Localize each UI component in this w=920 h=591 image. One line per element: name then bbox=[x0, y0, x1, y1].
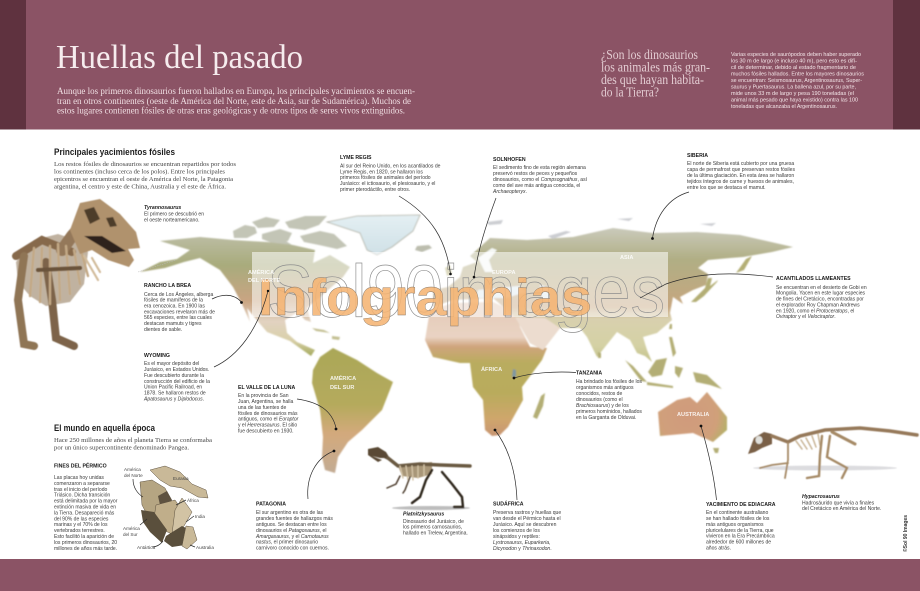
T. rex skeleton bbox=[16, 199, 140, 346]
Acantilados Llameantes caption: en 1920, como el Protoceratops, el bbox=[776, 308, 854, 314]
footer band bbox=[0, 559, 920, 591]
Fines del Pérmico caption: tras el inicio del período bbox=[54, 487, 107, 493]
Acantilados Llameantes caption: ACANTILADOS LLAMEANTES bbox=[776, 276, 851, 282]
question heading: los animales más gran- bbox=[601, 60, 710, 74]
watermark: Infographias bbox=[258, 269, 592, 327]
continent labels: AMÉRICA bbox=[330, 374, 356, 382]
Solnhofen caption: como del ave más antigua conocida, el bbox=[493, 183, 580, 189]
Sudáfrica caption: Jurásico. Aquí se descubren bbox=[493, 522, 557, 528]
Solnhofen caption: El sedimento fino de esta región alemana bbox=[493, 165, 586, 171]
Tyrannosaurus caption: Tyrannosaurus bbox=[144, 205, 181, 211]
Sudáfrica caption: los comienzos de los bbox=[493, 528, 540, 534]
Pangea map: América bbox=[124, 467, 141, 472]
Solnhofen caption: Archaeopteryx. bbox=[492, 189, 527, 195]
Solnhofen caption: SOLNHOFEN bbox=[493, 157, 526, 163]
Ediacara caption: se han hallado fósiles de los bbox=[706, 516, 770, 522]
Acantilados Llameantes caption: el explorador Roy Chapman Andrews bbox=[776, 302, 860, 308]
Siberia caption bbox=[687, 153, 795, 191]
section: principal fossil sites: los continentes (incluso cerca de los polos). Entre los principales bbox=[54, 168, 225, 176]
Lyme Regis caption: Al sur del Reino Unido, en los acantilados de bbox=[340, 164, 441, 170]
Ediacara caption bbox=[706, 502, 776, 552]
Wyoming caption: WYOMING bbox=[144, 353, 170, 359]
Wyoming caption: construcción del edificio de la bbox=[144, 379, 210, 385]
Sudáfrica caption: Preserva rastros y huellas que bbox=[493, 510, 561, 516]
Hypacrosaurus caption: del Cretácico en América del Norte. bbox=[802, 506, 881, 512]
Pangea map: África bbox=[187, 497, 199, 503]
Acantilados Llameantes caption: Oviraptor y el Velociraptor. bbox=[776, 314, 836, 320]
Ediacara caption: más antiguos organismos bbox=[706, 522, 764, 528]
Piatnitzkysaurus caption: Piatnitzkysaurus bbox=[403, 512, 444, 518]
Ediacara caption: pluricelulares de la Tierra, que bbox=[706, 528, 774, 534]
answer text: Varias especies de saurópodos deben haber superado bbox=[731, 52, 861, 58]
Ediacara caption: YACIMIENTO DE EDIACARA bbox=[706, 502, 776, 508]
South America bbox=[312, 348, 393, 473]
Arabia pale area bbox=[515, 317, 560, 350]
El Valle de la Luna caption: Juan, Argentina, se halla bbox=[238, 399, 293, 405]
Solnhofen caption: dinosaurios, como el Compsognathus, así bbox=[493, 177, 588, 183]
section: principal fossil sites: Los restos fósiles de dinosaurios se encuentran repartidos por todos bbox=[54, 161, 236, 168]
Tanzania caption: conocidos, restos de bbox=[576, 391, 622, 397]
Wyoming caption: Es el mayor depósito del bbox=[144, 361, 199, 367]
Rancho La Brea caption: destacan mamuts y tigres bbox=[144, 321, 202, 327]
answer text: mide unos 33 m de largo y pesa 190 toneladas (el bbox=[731, 91, 854, 97]
Solnhofen caption bbox=[492, 157, 588, 195]
section: the world at that time bbox=[54, 423, 212, 452]
intro text: estos lugares contienen fósiles de otras eras geológicas y de otros tipos de seres vivos extinguidos. bbox=[57, 106, 405, 116]
continent labels: AUSTRALIA bbox=[677, 412, 709, 418]
Tanzania caption: dinosaurios (como el bbox=[576, 397, 623, 403]
Rancho La Brea caption: RANCHO LA BREA bbox=[144, 283, 191, 289]
El Valle de la Luna caption: antiguos, como el Eoraptor bbox=[238, 417, 299, 423]
section: the world at that time: por un único supercontinente denominado Pangea. bbox=[54, 444, 189, 452]
El Valle de la Luna caption: EL VALLE DE LA LUNA bbox=[238, 385, 296, 391]
continent labels bbox=[248, 255, 709, 418]
section: principal fossil sites: Principales yacimientos fósiles bbox=[54, 147, 175, 158]
El Valle de la Luna caption: En la provincia de San bbox=[238, 393, 289, 399]
Sudáfrica caption: Lystrosaurus, Euparkeria, bbox=[493, 540, 550, 546]
Tanzania caption bbox=[576, 371, 642, 421]
Fines del Pérmico caption: del 90% de las especies bbox=[54, 516, 109, 522]
Lyme Regis caption: primer pterodáctilo, entre otros. bbox=[340, 187, 410, 193]
Fines del Pérmico caption: Esto facilitó la aparición de bbox=[54, 534, 114, 540]
Patagonia caption: nastus, el primer dinosaurio bbox=[256, 540, 318, 546]
location dots bbox=[240, 237, 702, 452]
continent labels: DEL NORTE bbox=[248, 278, 280, 284]
Eurasia bbox=[433, 228, 793, 362]
continent labels: EUROPA bbox=[492, 270, 516, 276]
Sudáfrica caption: Dicynodon y Thrinaxodon. bbox=[493, 546, 552, 552]
Greenland bbox=[327, 215, 420, 255]
El Valle de la Luna caption: fósiles de dinosaurios más bbox=[238, 411, 298, 417]
Wyoming caption: Union Pacific Railroad, en bbox=[144, 385, 202, 391]
Tanzania caption: primeros homínidos, hallados bbox=[576, 409, 642, 415]
Piatnitzkysaurus caption: hallado en Trelew, Argentina. bbox=[403, 530, 468, 536]
Africa bbox=[425, 302, 547, 436]
Rancho La Brea caption: dientes de sable. bbox=[144, 327, 182, 333]
Fines del Pérmico caption: Triásico. Dicha transición bbox=[54, 493, 110, 499]
header band bbox=[0, 0, 920, 130]
Pangea map: del Sur bbox=[123, 532, 138, 537]
Rancho La Brea caption bbox=[144, 283, 215, 333]
Pangea map: del Norte bbox=[124, 473, 143, 478]
Patagonia caption: PATAGONIA bbox=[256, 502, 286, 508]
Sudáfrica caption bbox=[493, 501, 561, 552]
answer text: animal más pesado que haya existido) contra las 100 bbox=[731, 98, 858, 104]
Tyrannosaurus caption: El primero se descubrió en bbox=[144, 212, 204, 218]
seas bbox=[476, 285, 550, 301]
Fines del Pérmico caption: vertebrados terrestres. bbox=[54, 528, 105, 534]
Sudáfrica caption: SUDÁFRICA bbox=[493, 501, 524, 508]
Fines del Pérmico caption bbox=[54, 462, 118, 552]
Patagonia caption: dinosaurios el Patagosaurus, el bbox=[256, 528, 326, 534]
Fines del Pérmico caption: marinas y el 70% de los bbox=[54, 522, 108, 528]
Piatnitzkysaurus skeleton bbox=[368, 447, 470, 510]
Siberia caption: capa de permafrost que preservan restos fósiles bbox=[687, 167, 795, 173]
Siberia caption: entre los que se destaca el mamut. bbox=[687, 185, 766, 191]
copyright: ©Sol 90 Images bbox=[902, 515, 909, 552]
Fines del Pérmico caption: los primeros dinosaurios, 20 bbox=[54, 540, 117, 546]
El Valle de la Luna caption bbox=[238, 385, 299, 434]
Acantilados Llameantes caption: Se encuentran en el desierto de Gobi en bbox=[776, 285, 867, 291]
El Valle de la Luna caption: una de las fuentes de bbox=[238, 405, 286, 411]
Tanzania caption: organismos más antiguos bbox=[576, 385, 634, 391]
intro text bbox=[57, 86, 415, 116]
Tyrannosaurus caption bbox=[144, 205, 204, 224]
section: the world at that time: El mundo en aquella época bbox=[54, 423, 156, 434]
Lyme Regis caption: Jurásico: el ictiosaurio, el plesiosaurio, y el bbox=[340, 181, 435, 187]
answer text: se encuentran: Seismosaurus, Argentinosaurus, Super- bbox=[731, 78, 862, 84]
Wyoming caption bbox=[143, 353, 210, 402]
continent labels: ASIA bbox=[620, 255, 633, 261]
Hypacrosaurus caption bbox=[802, 494, 881, 512]
Fines del Pérmico caption: comenzaron a separarse bbox=[54, 481, 110, 487]
Pangea map: Australia bbox=[196, 545, 214, 550]
Patagonia caption bbox=[255, 502, 333, 552]
Tanzania caption: en la Garganta de Olduvai. bbox=[576, 415, 636, 421]
Patagonia caption: antiguos. Se destacan entre los bbox=[256, 522, 327, 528]
rib cage mass bbox=[16, 234, 88, 306]
Tanzania caption: Ha brindado los fósiles de los bbox=[576, 379, 642, 385]
Patagonia caption: El sur argentino es otra de las bbox=[256, 510, 324, 516]
Pangea map bbox=[123, 466, 214, 550]
Wyoming caption: Fue descubierto durante la bbox=[144, 373, 204, 379]
islands of Asia and Europe bbox=[445, 256, 752, 453]
Rancho La Brea caption: fósiles de mamíferos de la bbox=[144, 298, 203, 304]
Patagonia caption: grandes fuentes de hallazgos más bbox=[256, 516, 333, 522]
Sudáfrica caption: sinápsidos y reptiles: bbox=[493, 534, 540, 540]
answer text: saurus y Puertasaurus. La ballena azul, por su parte, bbox=[731, 85, 856, 91]
Fines del Pérmico caption: Las placas hoy unidas bbox=[54, 475, 104, 481]
Acantilados Llameantes caption bbox=[776, 276, 867, 320]
Fines del Pérmico caption: está delimitada por la mayor bbox=[54, 499, 118, 505]
answer text: cil de determinar, debido al estado fragmentario de bbox=[731, 65, 856, 71]
question heading: des que hayan habita- bbox=[601, 72, 704, 87]
arctic islands bbox=[233, 216, 347, 249]
Fines del Pérmico caption: FINES DEL PÉRMICO bbox=[54, 462, 107, 470]
Acantilados Llameantes caption: Mongolia. Yacen en este lugar especies bbox=[776, 291, 866, 297]
Ediacara caption: En el continente australiano bbox=[706, 510, 768, 516]
Wyoming caption: 1878. Se hallaron restos de bbox=[144, 391, 206, 397]
Siberia caption: SIBERIA bbox=[687, 153, 708, 159]
Solnhofen caption: preservó restos de peces y pequeños bbox=[493, 171, 578, 177]
Piatnitzkysaurus caption: los primeros carnosaurios, bbox=[403, 524, 462, 530]
answer text: los 30 m de largo (e incluso 40 m), pero esto es difí- bbox=[731, 59, 857, 65]
Pangea map: América bbox=[123, 526, 140, 531]
section: principal fossil sites bbox=[54, 147, 236, 190]
Wyoming caption: Jurásico, en Estados Unidos. bbox=[144, 367, 209, 373]
Lyme Regis caption: primeros fósiles de animales del período bbox=[340, 175, 431, 181]
Tanzania caption: Brachiosaurus) y de los bbox=[576, 403, 629, 409]
Australia bbox=[658, 392, 727, 442]
answer text: toneladas que alcanzaba el Argentinosaurus. bbox=[731, 104, 837, 110]
watermark: Sol90images bbox=[267, 250, 665, 333]
intro text: tran en otros continentes (oeste de América del Norte, este de Asia, sur de Sudamérica). Muchos de bbox=[57, 96, 411, 107]
continent labels: AMÉRICA bbox=[248, 268, 274, 276]
Wyoming caption: Apatosaurus y Diplodocus. bbox=[143, 396, 204, 402]
Ediacara caption: años atrás. bbox=[706, 546, 731, 552]
Fines del Pérmico caption: extinción masiva de vida en bbox=[54, 504, 116, 510]
continent labels: DEL SUR bbox=[330, 385, 354, 391]
Tyrannosaurus caption: el oeste norteamericano. bbox=[144, 218, 200, 224]
Patagonia caption: carnívoro conocido con cuernos. bbox=[256, 546, 329, 552]
section: principal fossil sites: epicentros se encuentran el oeste de América del Norte, la Patagonia bbox=[54, 176, 233, 183]
answer text bbox=[731, 52, 864, 110]
North America bbox=[140, 237, 350, 356]
Lyme Regis caption bbox=[340, 155, 441, 193]
Lyme Regis caption: Lyme Regis, en 1820, se hallaron los bbox=[340, 169, 423, 175]
question heading: ¿Son los dinosaurios bbox=[601, 47, 698, 62]
El Valle de la Luna caption: fue descubierto en 1930. bbox=[238, 428, 294, 434]
Acantilados Llameantes caption: de fines del Cretácico, encontradas por bbox=[776, 297, 864, 303]
Ediacara caption: alrededor de 600 millones de bbox=[706, 540, 771, 546]
Pangea map: Antártica bbox=[137, 545, 156, 550]
section: the world at that time: Hace 250 millones de años el planeta Tierra se conformaba bbox=[54, 437, 212, 444]
leader lines bbox=[138, 192, 773, 500]
Hypacrosaurus caption: Hypacrosaurus bbox=[802, 494, 840, 500]
section: principal fossil sites: argentina, el centro y este de China, Australia y el este de África. bbox=[54, 182, 226, 190]
continent labels: ÁFRICA bbox=[481, 366, 502, 373]
title: Huellas del pasado bbox=[56, 39, 303, 76]
Sudáfrica caption: van desde el Pérmico hasta el bbox=[493, 516, 561, 522]
El Valle de la Luna caption: y el Herrerasaurus. El sitio bbox=[238, 423, 297, 429]
Patagonia caption: Amargasaurus, y el Carnotaurus bbox=[255, 534, 329, 540]
Ediacara caption: vivieron en la Era Precámbrica bbox=[706, 534, 775, 540]
question heading: do la Tierra? bbox=[601, 84, 659, 100]
Pangea map: Eurasia bbox=[173, 476, 189, 481]
question heading bbox=[601, 47, 710, 100]
Rancho La Brea caption: excavaciones revelaron más de bbox=[144, 309, 215, 315]
Fines del Pérmico caption: millones de años más tarde. bbox=[54, 546, 117, 552]
Hypacrosaurus caption: Hadrosáurido que vivía a finales bbox=[802, 500, 875, 506]
Hypacrosaurus skeleton bbox=[748, 428, 917, 478]
Tanzania caption: TANZANIA bbox=[576, 371, 602, 377]
Rancho La Brea caption: Cerca de Los Ángeles, alberga bbox=[144, 291, 213, 298]
Rancho La Brea caption: era cenozoica. En 1900 las bbox=[144, 304, 205, 310]
Pangea map: India bbox=[195, 514, 205, 519]
Caribbean islands bbox=[312, 328, 340, 340]
Fines del Pérmico caption: la Tierra. Desapareció más bbox=[54, 510, 115, 516]
Siberia caption: tejidos íntegros de carne y huesos de animales, bbox=[687, 179, 794, 185]
Siberia caption: El norte de Siberia está cubierto por una gruesa bbox=[687, 161, 794, 167]
Siberia caption: de la última glaciación. En esta área se hallaron bbox=[687, 173, 794, 179]
Lyme Regis caption: LYME REGIS bbox=[340, 155, 372, 161]
Rancho La Brea caption: 565 especies, entre las cuales bbox=[144, 315, 212, 321]
world map bbox=[140, 215, 793, 473]
Piatnitzkysaurus caption: Dinosaurio del Jurásico, de bbox=[403, 519, 464, 525]
answer text: muchos fósiles hallados. Entre los mayores dinosaurios bbox=[731, 72, 864, 78]
intro text: Aunque los primeros dinosaurios fueron hallados en Europa, los principales yacimientos se encuen- bbox=[57, 86, 415, 97]
Piatnitzkysaurus caption bbox=[403, 512, 468, 536]
